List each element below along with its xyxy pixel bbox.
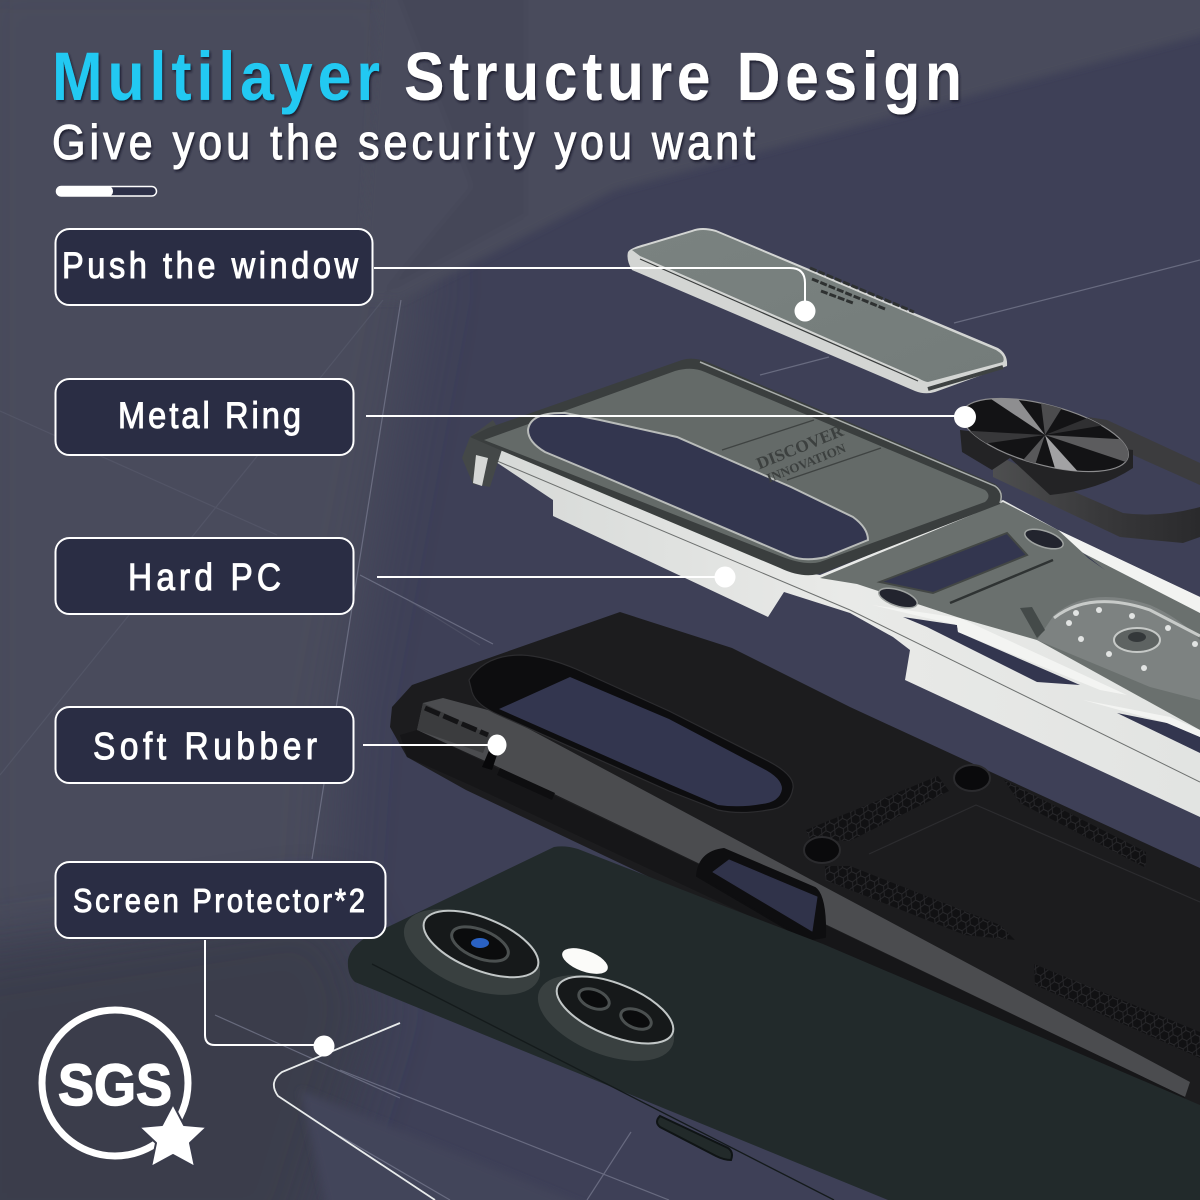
phone case: soft rubber layer: [390, 612, 1200, 1136]
engraved text: DISCOVER: [754, 421, 847, 473]
title: Structure Design: [404, 37, 962, 115]
SGS badge: [42, 1010, 207, 1167]
subtitle: Give you the security you want: [52, 114, 755, 170]
label: hard PC: Hard PC: [128, 556, 281, 598]
progress bar accent: [56, 186, 156, 196]
shell magnet plate: [1020, 597, 1200, 700]
push window plate: [628, 228, 1007, 393]
label: metal ring: Metal Ring: [118, 395, 301, 436]
side button: [657, 1116, 732, 1160]
main camera: [392, 892, 552, 1012]
ring disc body: [960, 430, 1133, 495]
ring arms: [993, 458, 1200, 543]
label: push the window: Push the window: [62, 245, 359, 286]
window frame: [470, 359, 1002, 575]
shell left tab: [462, 420, 505, 487]
case corner notch: [482, 748, 498, 770]
engraved text: INNOVATION: [764, 440, 848, 486]
label: metal ring: [56, 379, 354, 455]
shell green plate: [820, 502, 1200, 730]
title: Multilayer: [52, 37, 380, 115]
label: hard PC: [56, 538, 354, 614]
frame window cutout: [528, 413, 868, 559]
leader: screen protector: [205, 940, 334, 1056]
screen protector glass: [274, 1023, 435, 1200]
phone: [348, 846, 1200, 1200]
secondary cameras: [526, 958, 686, 1078]
leader: hard PC: [377, 566, 736, 588]
title: [52, 37, 962, 115]
case small side window: [697, 849, 825, 940]
leader: push the window: [374, 268, 816, 322]
case grip textures: [806, 776, 1200, 1058]
flash: [559, 943, 611, 979]
leader: soft rubber: [363, 734, 506, 756]
label: screen protector: Screen Protector*2: [73, 882, 365, 919]
label: soft rubber: [56, 707, 354, 783]
SGS badge: SGS: [58, 1053, 172, 1118]
metal ring: [960, 398, 1200, 543]
case screw posts: [954, 765, 990, 791]
case camera oval opening: [469, 655, 793, 812]
hard PC shell: [462, 420, 1200, 817]
label: push the window: [56, 229, 372, 305]
label: soft rubber: Soft Rubber: [93, 725, 317, 767]
label: screen protector: [56, 862, 386, 938]
case grey side strip: [417, 698, 1190, 1097]
leader: metal ring: [366, 406, 976, 428]
shell openings: [880, 533, 1027, 593]
star: [139, 1104, 207, 1167]
